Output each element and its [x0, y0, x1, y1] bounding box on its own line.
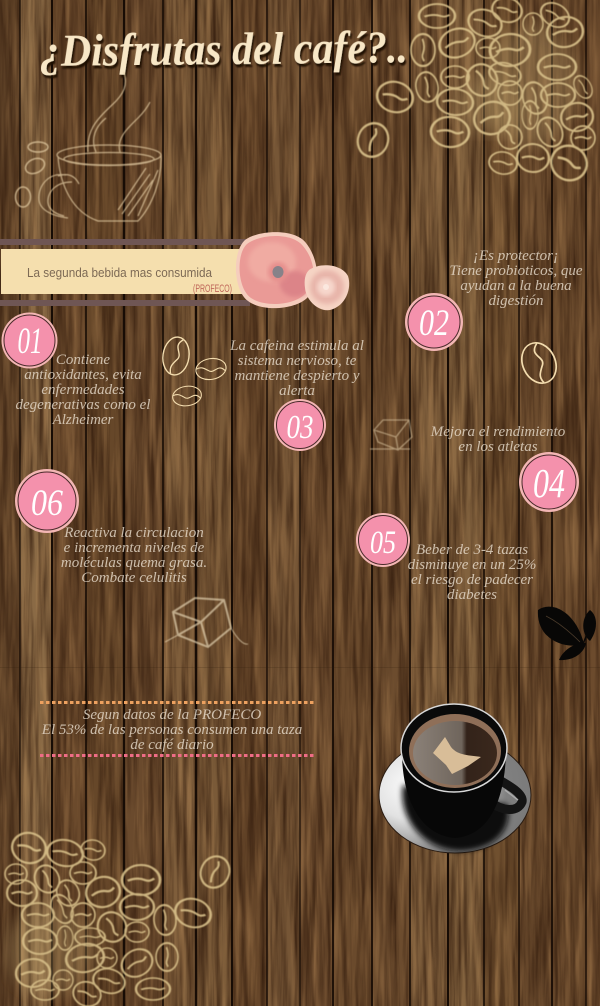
icon: small beans	[16, 142, 48, 207]
statistic callout: Segun datos de la PROFECO	[83, 707, 261, 723]
text: antioxidants: antioxidantes, evita	[24, 367, 142, 383]
illustration: coffee cup sketch	[16, 72, 161, 221]
rim	[401, 704, 507, 792]
badge 05	[356, 513, 410, 567]
text: athletes: en los atletas	[458, 439, 538, 455]
badge 02	[405, 293, 463, 351]
text: protector: ¡Es protector¡	[473, 248, 559, 264]
badge 01	[2, 312, 58, 368]
badge 01: 01	[18, 321, 42, 362]
text: circulation: Reactiva la circulacion	[63, 525, 204, 541]
icon: small cube	[370, 420, 412, 450]
text: antioxidants	[16, 352, 150, 428]
statistic callout: de café diario	[130, 737, 214, 753]
text: circulation: Combate celulitis	[81, 570, 187, 586]
icon: small rose	[305, 265, 349, 310]
text: diabetes: disminuye en un 25%	[408, 557, 536, 573]
text: circulation: e incrementa niveles de	[64, 540, 205, 556]
text: antioxidants: Alzheimer	[52, 412, 114, 428]
text: caffeine: La cafeina estimula al	[229, 338, 364, 354]
ribbon banner	[0, 239, 250, 306]
text: athletes	[430, 424, 566, 455]
coffee	[409, 714, 501, 788]
icon: single bean	[515, 337, 563, 389]
badge 06	[15, 469, 79, 533]
text: caffeine: sistema nervioso, te	[238, 353, 357, 369]
text: protector: Tiene probioticos, que	[449, 263, 583, 279]
saucer	[379, 737, 531, 853]
text: diabetes	[408, 542, 536, 603]
title: ¿Disfrutas del café?..	[40, 22, 408, 76]
statistic callout	[40, 702, 314, 756]
crema art	[433, 737, 481, 774]
text: diabetes: el riesgo de padecer	[411, 572, 533, 588]
text: protector: ayudan a la buena	[460, 278, 572, 294]
text: antioxidants: Contiene	[56, 352, 110, 368]
icon: three beans	[160, 335, 228, 408]
text: circulation	[61, 525, 207, 586]
icon: large rose	[236, 232, 317, 308]
text: diabetes: diabetes	[447, 587, 497, 603]
badge 04: 04	[533, 460, 565, 506]
banner text: La segunda bebida mas consumida	[27, 266, 212, 280]
text: caffeine: alerta	[279, 383, 315, 399]
icon: large cube	[165, 598, 248, 647]
text: diabetes: Beber de 3-4 tazas	[416, 542, 528, 558]
text: protector: digestión	[488, 293, 544, 309]
badge 03	[274, 399, 326, 451]
badge 06: 06	[31, 483, 63, 524]
handle	[490, 778, 522, 810]
badge 05: 05	[370, 525, 396, 561]
text: antioxidants: enfermedades	[41, 382, 125, 398]
illustration: black coffee cup	[379, 704, 531, 853]
text: athletes: Mejora el rendimiento	[430, 424, 566, 440]
badge 03: 03	[286, 409, 314, 446]
text: caffeine	[229, 338, 364, 399]
badge 04	[519, 452, 579, 512]
icon: black leaves	[538, 607, 596, 660]
text: circulation: moléculas quema grasa.	[61, 555, 207, 571]
statistic callout: El 53% de las personas consumen una taza	[41, 722, 302, 738]
banner source: (PROFECO)	[193, 283, 232, 295]
illustration: bean cluster top right	[353, 0, 596, 187]
text: antioxidants: degenerativas como el	[16, 397, 150, 413]
text: caffeine: mantiene despierto y	[235, 368, 360, 384]
text: protector	[449, 248, 583, 309]
badge 02: 02	[419, 303, 449, 344]
illustration: bean cluster bottom left	[5, 829, 234, 1006]
cup body	[402, 752, 506, 838]
